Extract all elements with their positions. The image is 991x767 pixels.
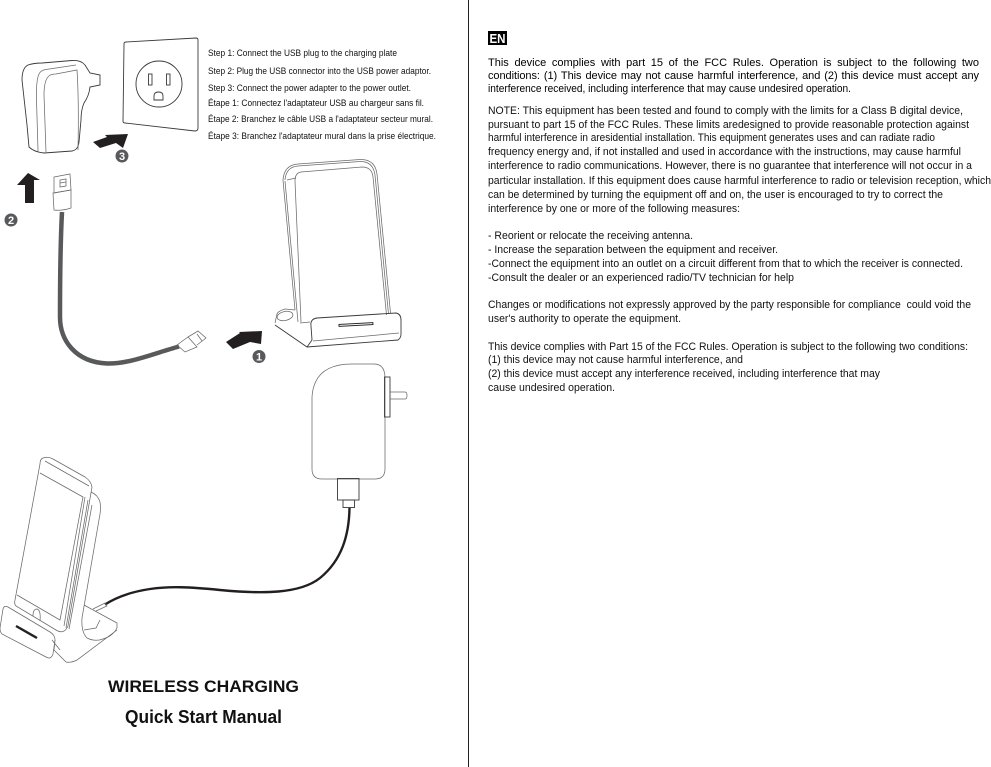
text block: setup steps: Step 2: Plug the USB connector into the USB power adaptor. (208, 66, 431, 76)
badge: 2 (4, 214, 18, 227)
text block: part 15 conditions: This device complies with Part 15 of the FCC Rules. Operation is subject to the following two conditions: (488, 341, 968, 353)
text block: setup steps: Step 3: Connect the power adapter to the power outlet. (208, 83, 411, 93)
text block: setup steps: Étape 2: Branchez le câble USB a l'adaptateur secteur mural. (208, 114, 433, 124)
arrow: step 1 (226, 331, 262, 349)
list: corrective measures: - Increase the separation between the equipment and receiver. (488, 244, 778, 256)
list: corrective measures: - Reorient or relocate the receiving antenna. (488, 230, 693, 242)
text block: NOTE paragraph: NOTE: This equipment has been tested and found to comply with the limits for a Class B digital device, (488, 105, 963, 117)
badge: 1: 1 (256, 352, 262, 364)
text block: setup steps: Étape 3: Branchez l'adaptateur mural dans la prise électrique. (208, 131, 436, 141)
panel: FCC compliance notice (488, 31, 991, 394)
badge: 2: 2 (8, 215, 14, 227)
text block: NOTE paragraph: pursuant to part 15 of the FCC Rules. These limits aredesigned to provide reasonable protection against (488, 119, 969, 131)
text block: NOTE paragraph: frequency energy and, if not installed and used in accordance with the instructions, may cause harmful (488, 146, 961, 158)
icon: phone on charging stand with cable (0, 457, 350, 662)
text block: NOTE paragraph (488, 105, 991, 215)
title: wireless charging: WIRELESS CHARGING (108, 677, 299, 696)
text block: modifications warning: user's authority to operate the equipment. (488, 313, 681, 325)
text block: part 15 conditions: (2) this device must accept any interference received, including interference that may (488, 368, 880, 380)
text block: modifications warning (488, 299, 971, 325)
text block: part 15 conditions (488, 341, 968, 394)
badge: 3: 3 (119, 151, 125, 163)
title: quick start manual: Quick Start Manual (125, 707, 282, 727)
arrow: step 2 (17, 173, 40, 203)
badge: 3 (116, 150, 128, 163)
text block: setup steps: Step 1: Connect the USB plug to the charging plate (208, 48, 397, 58)
text block: FCC intro: This device complies with part 15 of the FCC Rules. Operation is subject to the following two (488, 57, 979, 69)
icon: USB cable (53, 174, 206, 364)
text block: NOTE paragraph: harmful interference in aresidential installation. This equipment generates uses and can radiate radio (488, 132, 935, 144)
icon: wall adapter with cord (312, 364, 407, 508)
text block: FCC intro (488, 57, 980, 95)
text block: FCC intro: conditions: (1) This device may not cause harmful interference, and (2) this device must accept any (488, 70, 980, 82)
text block: NOTE paragraph: can be determined by turning the equipment off and on, the user is encouraged to try to correct the (488, 189, 943, 201)
badge: EN language tag: EN (490, 31, 506, 46)
icon: empty wireless charging stand (275, 159, 401, 347)
list: corrective measures: -Connect the equipment into an outlet on a circuit different from that to which the receiver is connected. (488, 258, 963, 270)
text block: setup steps (208, 48, 436, 141)
text block: part 15 conditions: (1) this device may not cause harmful interference, and (488, 354, 743, 366)
text block: NOTE paragraph: interference by one or more of the following measures: (488, 203, 740, 215)
text block: NOTE paragraph: interference to radio communications. However, there is no guarantee that interference will not occur in a (488, 160, 973, 172)
text block: modifications warning: Changes or modifications not expressly approved by the party responsible for compliance could void the (488, 299, 971, 311)
text block: part 15 conditions: cause undesired operation. (488, 382, 615, 394)
list: corrective measures: -Consult the dealer or an experienced radio/TV technician for help (488, 272, 794, 284)
list: corrective measures (488, 230, 963, 284)
text block: FCC intro: interference received, including interference that may cause undesired operation. (488, 83, 851, 95)
icon: wall outlet (123, 38, 198, 131)
panel: quick start illustrations (0, 38, 436, 727)
arrow: step 3 (93, 134, 128, 148)
icon: USB power adaptor (22, 60, 100, 153)
badge: 1 (252, 350, 266, 364)
text block: setup steps: Étape 1: Connectez l'adaptateur USB au chargeur sans fil. (208, 98, 424, 108)
